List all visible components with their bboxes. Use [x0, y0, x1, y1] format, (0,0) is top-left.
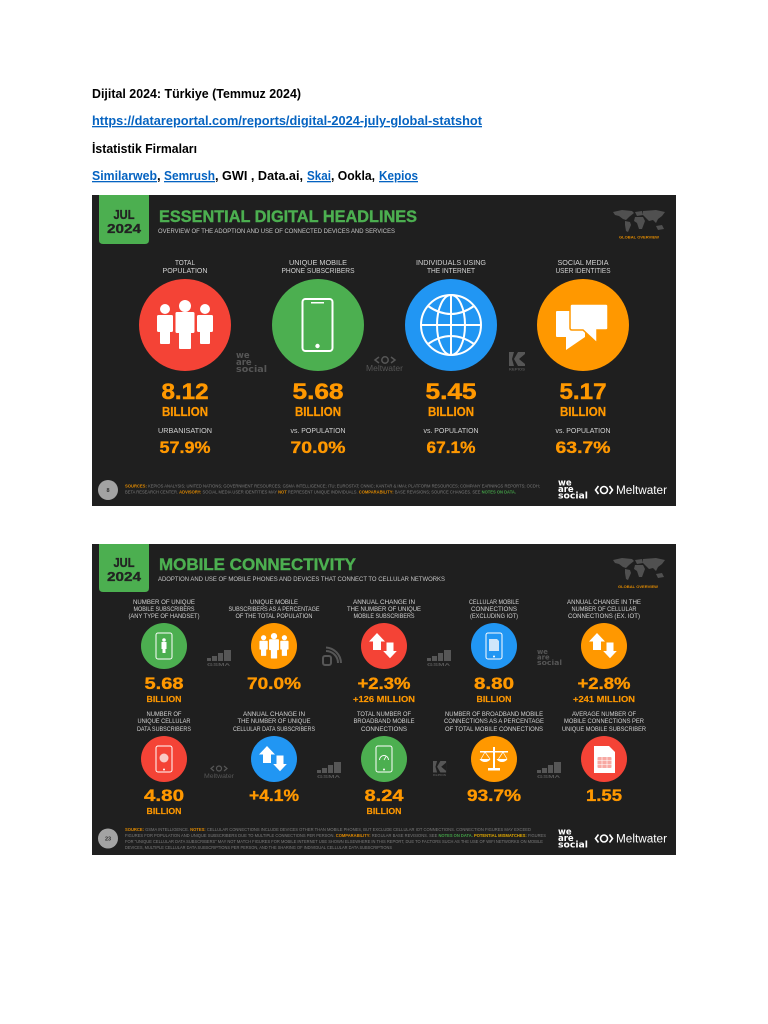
- stat: internet users: 67.1%: [426, 438, 476, 457]
- stat: broadband mobile connections: BILLION: [366, 806, 402, 816]
- statistics firm list: Similarweb: [92, 168, 157, 183]
- stat: internet users: BILLION: [428, 405, 474, 419]
- stat: annual change in mobile subscribers: ANNUAL CHANGE IN: [353, 599, 415, 606]
- stat: broadband mobile connections: 8.24: [364, 786, 404, 805]
- date tab: 2024: [107, 221, 142, 236]
- stat: internet users: INDIVIDUALS USING: [416, 258, 486, 267]
- stat: annual change in mobile subscribers: [347, 599, 421, 704]
- stat: total population: POPULATION: [162, 266, 208, 275]
- logo: we are social: [558, 478, 588, 502]
- heading: Dijital 2024: Dijital 2024: Türkiye (Temmuz 2024): [92, 86, 301, 101]
- statistics firm list: [92, 168, 418, 183]
- sources footnote: SOURCES: KEPIOS ANALYSIS; UNITED NATIONS; GOVERNMENT RESOURCES; GSMA INTELLIGENCE; ITU; EUROSTAT; CNNIC; KANTAR & IMAI; PLATFORM RESOURCES; COMPANY EARNINGS REPORTS; OCDH;: [125, 484, 540, 488]
- watermark: gsma: [207, 650, 231, 667]
- stat: cellular data subscribers: DATA SUBSCRIBERS: [137, 726, 191, 733]
- stat: social media users: [537, 258, 629, 457]
- icon: world map: GLOBAL OVERVIEW: [619, 234, 659, 240]
- statistics firm list: ,: [157, 168, 161, 183]
- logo: meltwater: Meltwater: [616, 834, 667, 846]
- watermark: we are social: are: [236, 358, 252, 368]
- stat: total population: TOTAL: [175, 258, 195, 267]
- statistics firm list: Semrush: [164, 168, 215, 183]
- subtitle: OVERVIEW OF THE ADOPTION AND USE OF CONNECTED DEVICES AND SERVICES: [158, 228, 395, 235]
- stat: subscribers as percentage of population: OF THE TOTAL POPULATION: [236, 613, 312, 620]
- stat: broadband percentage of connections: OF TOTAL MOBILE CONNECTIONS: [445, 726, 543, 733]
- document header text: [92, 86, 483, 183]
- stat: broadband percentage of connections: CONNECTIONS AS A PERCENTAGE: [444, 718, 544, 725]
- stat: social media users: vs. POPULATION: [556, 426, 610, 435]
- statistics firm list: Skai: [307, 168, 331, 183]
- stat: mobile subscribers: PHONE SUBSCRIBERS: [282, 266, 355, 275]
- date tab: JUL: [114, 555, 135, 570]
- stat: broadband mobile connections: [354, 711, 414, 816]
- stat: annual change in mobile subscribers: THE NUMBER OF UNIQUE: [347, 606, 421, 613]
- stat: subscribers as percentage of population: 70.0%: [247, 674, 301, 693]
- stat: annual change in mobile subscribers: MOBILE SUBSCRIBERS: [354, 613, 414, 620]
- stat: unique mobile subscribers: 5.68: [144, 674, 184, 693]
- stat: annual change in cellular data subscribers: THE NUMBER OF UNIQUE: [238, 718, 310, 725]
- logo: we are social: are: [558, 834, 574, 844]
- stat: broadband percentage of connections: NUMBER OF BROADBAND MOBILE: [445, 711, 543, 718]
- stat: mobile subscribers: 5.68: [292, 379, 344, 404]
- watermark: signal icon: [323, 648, 341, 665]
- stat: cellular mobile connections: CONNECTIONS: [471, 606, 517, 613]
- stat: cellular data subscribers: BILLION: [146, 806, 182, 816]
- stat: social media users: 63.7%: [556, 438, 610, 457]
- watermark: gsma: [427, 650, 451, 667]
- stat: mobile subscribers: UNIQUE MOBILE: [289, 258, 347, 267]
- stat: annual change in cellular connections: NUMBER OF CELLULAR: [572, 606, 637, 613]
- watermark: meltwater: Meltwater: [366, 364, 403, 373]
- stat: total population: URBANISATION: [158, 426, 212, 435]
- watermark: we are social: we: [236, 351, 250, 361]
- logo: we are social: social: [558, 840, 588, 850]
- stat: broadband percentage of connections: [444, 711, 544, 805]
- stat: annual change in cellular data subscribers: ANNUAL CHANGE IN: [243, 711, 305, 718]
- stat: unique mobile subscribers: NUMBER OF UNIQUE: [133, 599, 195, 606]
- watermark: meltwater: [366, 357, 403, 373]
- watermark: we are social: social: [236, 365, 267, 375]
- stat: annual change in cellular connections: +241 MILLION: [573, 694, 635, 704]
- stat: cellular mobile connections: BILLION: [476, 694, 512, 704]
- title: MOBILE CONNECTIVITY: [159, 556, 356, 574]
- stat: connections per subscriber: AVERAGE NUMBER OF: [572, 711, 636, 718]
- icon: world map: GLOBAL OVERVIEW: [618, 584, 658, 589]
- stat: annual change in cellular data subscribers: +4.1%: [249, 786, 299, 805]
- icon: world map: [613, 210, 665, 240]
- watermark: we are social: [236, 351, 267, 375]
- stat: cellular data subscribers: NUMBER OF: [146, 711, 182, 718]
- panel: essential digital headlines: [92, 195, 676, 506]
- stat: annual change in cellular connections: +2.8%: [578, 674, 630, 693]
- stat: subscribers as percentage of population: UNIQUE MOBILE: [250, 599, 298, 606]
- logo: we are social: [558, 828, 588, 850]
- stat: annual change in cellular connections: [567, 599, 641, 704]
- stat: cellular mobile connections: [469, 599, 519, 704]
- stat: cellular data subscribers: 4.80: [144, 786, 184, 805]
- sources footnote: BETA RESEARCH CENTER. ADVISORY: SOCIAL MEDIA USER IDENTITIES MAY NOT REPRESENT UNIQUE INDIVIDUALS. COMPARABILITY: BASE REVISIONS; SOURCE CHANGES. SEE NOTES ON DATA.: [125, 490, 516, 494]
- statistics firm list: Kepios: [379, 168, 418, 183]
- watermark: gsma: [317, 762, 341, 779]
- page number badge: [98, 480, 118, 500]
- date tab: [99, 195, 149, 244]
- watermark: kepios: [433, 761, 446, 777]
- page number badge: 23: [105, 836, 111, 842]
- report link: https://datareportal.com/reports/digital-2024-july-global-statshot: [92, 113, 483, 128]
- stat: cellular mobile connections: (EXCLUDING IOT): [470, 613, 518, 620]
- date tab: JUL: [114, 207, 135, 222]
- statistics firm list: , GWI , Data.ai,: [215, 168, 303, 183]
- logo: we are social: we: [558, 828, 572, 838]
- stat: cellular mobile connections: CELLULAR MOBILE: [469, 599, 519, 606]
- stat: cellular data subscribers: [137, 711, 191, 816]
- statistics firm list: , Ookla,: [331, 168, 375, 183]
- source notes footnote: DEVICES, MULTIPLE CELLULAR DATA SUBSCRIPTIONS PER PERSON, AND THE SHARING OF INDIVIDUAL CELLULAR DATA SUBSCRIPTIONS: [125, 845, 392, 850]
- source notes footnote: [125, 827, 546, 850]
- source notes footnote: FIGURES FOR POPULATION AND UNIQUE SUBSCRIBERS DUE TO MULTIPLE CONNECTIONS PER PERSON. COMPARABILITY: REGULAR BASE REVISIONS. SEE NOTES ON DATA. POTENTIAL MISMATCHES: FIGURES: [125, 833, 546, 838]
- stat: total population: 57.9%: [160, 438, 210, 457]
- stat: connections per subscriber: [562, 711, 646, 805]
- stat: internet users: vs. POPULATION: [424, 426, 478, 435]
- watermark: we are social: [537, 648, 562, 667]
- stat: cellular mobile connections: 8.80: [474, 674, 514, 693]
- stat: annual change in cellular data subscribers: [233, 711, 315, 805]
- page number badge: 8: [106, 488, 110, 494]
- stat: unique mobile subscribers: BILLION: [146, 694, 182, 704]
- stat: mobile subscribers: [272, 258, 364, 457]
- stat: total population: 8.12: [162, 379, 208, 404]
- stat: internet users: [405, 258, 497, 457]
- page number badge: [98, 828, 118, 848]
- stat: mobile subscribers: vs. POPULATION: [290, 426, 346, 435]
- watermark: meltwater: Meltwater: [204, 773, 235, 780]
- logo: meltwater: [596, 834, 667, 846]
- logo: meltwater: Meltwater: [616, 485, 667, 497]
- icon: world map: [613, 558, 665, 589]
- stat: social media users: USER IDENTITIES: [556, 266, 611, 275]
- stat: broadband percentage of connections: 93.7%: [467, 786, 521, 805]
- stat: annual change in cellular data subscribers: CELLULAR DATA SUBSCRIBERS: [233, 726, 315, 733]
- stat: annual change in mobile subscribers: +2.3%: [358, 674, 410, 693]
- stat: broadband mobile connections: CONNECTIONS: [361, 726, 407, 733]
- stat: broadband mobile connections: TOTAL NUMBER OF: [357, 711, 411, 718]
- stat: annual change in cellular connections: CONNECTIONS (EX. IOT): [568, 613, 640, 620]
- watermark: kepios: [509, 352, 526, 372]
- stat: mobile subscribers: BILLION: [295, 405, 341, 419]
- stat: total population: BILLION: [162, 405, 208, 419]
- stat: internet users: THE INTERNET: [427, 266, 475, 275]
- stat: annual change in cellular connections: ANNUAL CHANGE IN THE: [567, 599, 641, 606]
- stat: unique mobile subscribers: [128, 599, 200, 704]
- logo: meltwater: [596, 485, 667, 497]
- watermark: we are social: we: [537, 648, 548, 656]
- stat: unique mobile subscribers: (ANY TYPE OF HANDSET): [128, 613, 200, 620]
- date tab: 2024: [107, 569, 142, 584]
- source notes footnote: FOR "UNIQUE CELLULAR DATA SUBSCRIBERS" MAY NOT MATCH FIGURES FOR MOBILE INTERNET USE SHOWN ELSEWHERE IN THIS REPORT, DUE TO FACTORS SUCH AS THE USE OF WIFI NETWORKS ON MOBILE: [125, 839, 543, 844]
- stat: social media users: 5.17: [560, 379, 606, 404]
- stat: subscribers as percentage of population: SUBSCRIBERS AS A PERCENTAGE: [228, 606, 320, 613]
- sources footnote: [125, 484, 540, 494]
- heading: statistics firms: İstatistik Firmaları: [92, 141, 197, 156]
- panel: mobile connectivity: [92, 544, 676, 855]
- stat: social media users: SOCIAL MEDIA: [558, 258, 609, 267]
- watermark: gsma: [537, 762, 561, 779]
- stat: internet users: 5.45: [426, 379, 476, 404]
- stat: cellular data subscribers: UNIQUE CELLULAR: [138, 718, 191, 725]
- stat: connections per subscriber: 1.55: [586, 786, 622, 805]
- stat: broadband mobile connections: BROADBAND MOBILE: [354, 718, 414, 725]
- stat: mobile subscribers: 70.0%: [290, 438, 346, 457]
- stat: unique mobile subscribers: MOBILE SUBSCRIBERS: [134, 606, 194, 613]
- watermark: we are social: are: [537, 654, 550, 662]
- stat: subscribers as percentage of population: [228, 599, 320, 693]
- stat: total population: [139, 258, 231, 457]
- stat: connections per subscriber: MOBILE CONNECTIONS PER: [564, 718, 644, 725]
- watermark: we are social: social: [537, 659, 562, 667]
- stat: annual change in mobile subscribers: +126 MILLION: [353, 694, 415, 704]
- source notes footnote: SOURCE: GSMA INTELLIGENCE. NOTES: CELLULAR CONNECTIONS INCLUDE DEVICES OTHER THAN MOBILE PHONES, BUT EXCLUDE CELLULAR IOT CONNECTIONS. CONNECTION FIGURES MAY EXCEED: [125, 827, 531, 832]
- stat: connections per subscriber: UNIQUE MOBILE SUBSCRIBER: [562, 726, 646, 733]
- watermark: meltwater: [204, 766, 235, 780]
- subtitle: ADOPTION AND USE OF MOBILE PHONES AND DEVICES THAT CONNECT TO CELLULAR NETWORKS: [158, 576, 445, 583]
- title: ESSENTIAL DIGITAL HEADLINES: [159, 208, 417, 226]
- logo: we are social: are: [558, 485, 574, 495]
- logo: we are social: we: [558, 478, 572, 488]
- date tab: [99, 544, 149, 592]
- stat: social media users: BILLION: [560, 405, 606, 419]
- logo: we are social: social: [558, 492, 588, 502]
